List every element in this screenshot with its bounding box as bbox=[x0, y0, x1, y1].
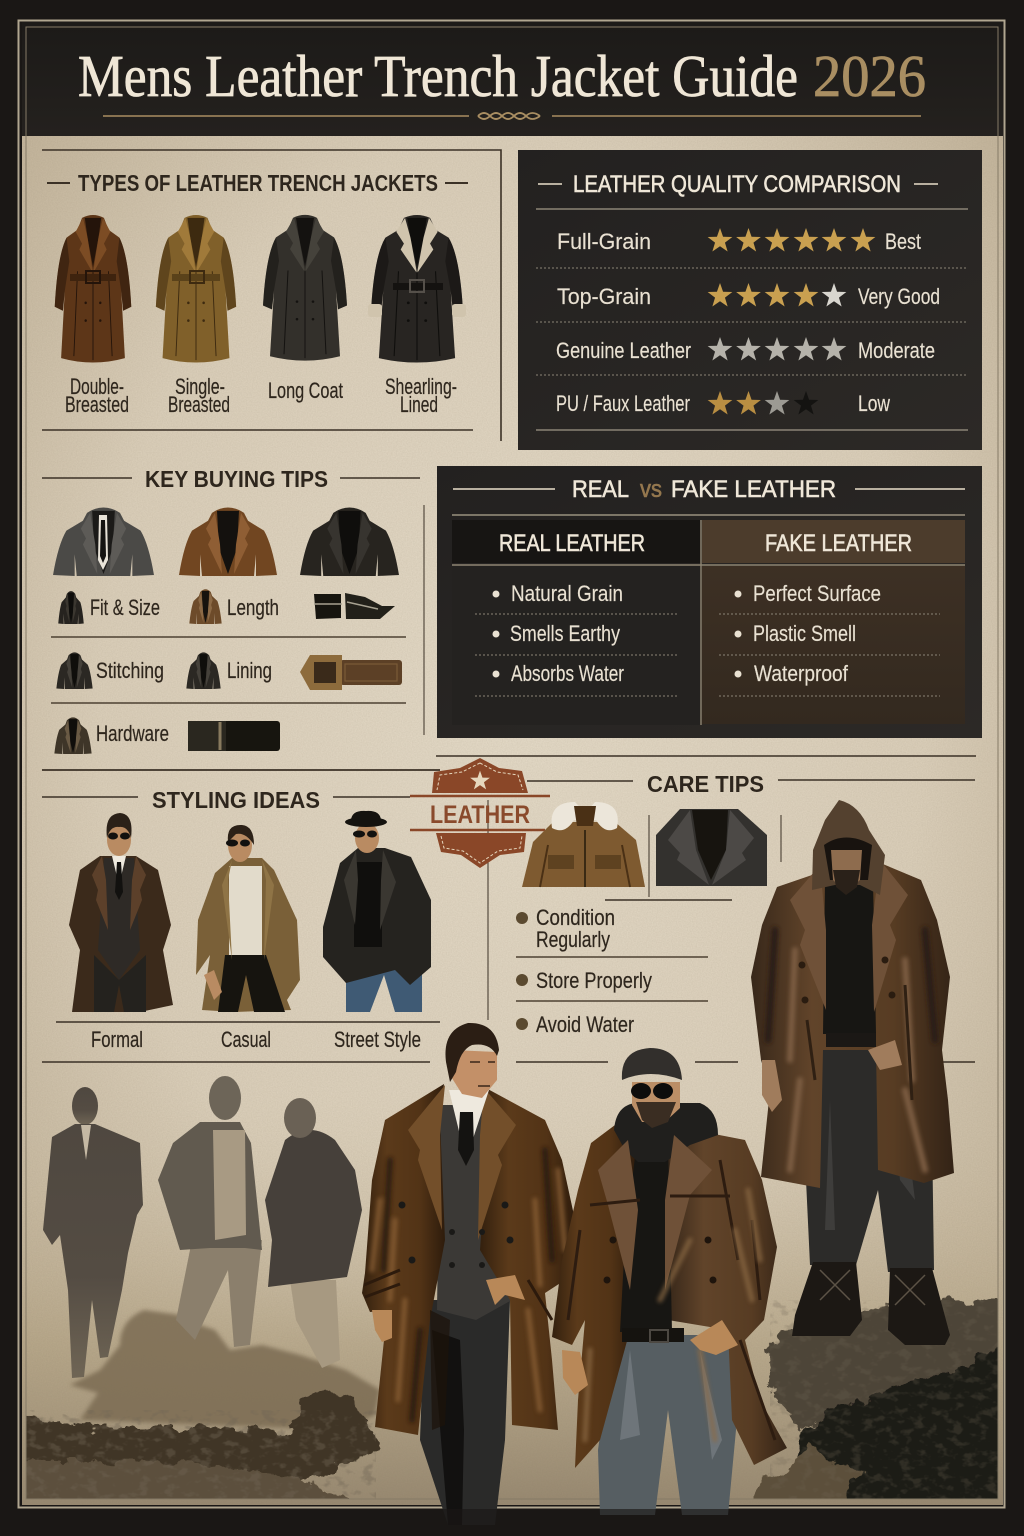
column: real leather: REAL LEATHER bbox=[499, 530, 645, 557]
coat buttons bbox=[604, 1236, 716, 1284]
coat: long coat bbox=[263, 215, 347, 403]
coat: single-breasted: Single- bbox=[175, 374, 225, 399]
long coat bbox=[751, 862, 954, 1188]
face bbox=[831, 850, 862, 892]
tip: fit and size: Fit & Size bbox=[90, 595, 160, 620]
tip: fit and size bbox=[58, 591, 160, 624]
column: fake leather: Plastic Smell bbox=[753, 621, 856, 646]
heading: key buying tips: KEY BUYING TIPS bbox=[145, 466, 328, 492]
silhouette: hooded bbox=[265, 1098, 362, 1368]
figure: street style bbox=[323, 811, 431, 1012]
sleeve shading bbox=[768, 930, 935, 1170]
heading: real vs fake: FAKE LEATHER bbox=[671, 476, 836, 503]
column: real leather: Smells Earthy bbox=[510, 621, 620, 646]
figure: casual bbox=[196, 825, 300, 1012]
column: fake leather: Perfect Surface bbox=[753, 581, 881, 606]
labels: styling: Street Style bbox=[334, 1027, 421, 1052]
row: pu / faux leather bbox=[556, 391, 890, 416]
labels: styling: Formal bbox=[91, 1027, 143, 1052]
section dividers bbox=[42, 756, 976, 1062]
panel: types of leather trench jackets bbox=[42, 150, 501, 441]
tip: length: Length bbox=[227, 595, 279, 620]
column: fake leather: Waterproof bbox=[754, 661, 849, 686]
coat: shearling-lined: Shearling- bbox=[385, 374, 457, 399]
coat: single-breasted bbox=[156, 215, 236, 417]
panel: styling ideas bbox=[42, 787, 440, 1052]
lapels bbox=[598, 1135, 712, 1290]
person: hooded man in trench bbox=[751, 800, 954, 1345]
bottom shadow band bbox=[0, 1509, 1024, 1536]
shirt and tie bbox=[449, 1090, 489, 1160]
panel: leather quality comparison bbox=[518, 150, 982, 450]
lapels bbox=[790, 860, 908, 1012]
coat: long coat: Long Coat bbox=[268, 378, 343, 403]
person: casual man bbox=[552, 1048, 787, 1515]
title: 2026 bbox=[813, 43, 926, 109]
tip: length bbox=[189, 589, 279, 624]
panel: real vs fake leather bbox=[437, 466, 982, 738]
coat: double-breasted: Breasted bbox=[65, 392, 129, 417]
badge: leather: LEATHER bbox=[430, 801, 530, 829]
person: formal man bbox=[362, 1023, 575, 1525]
column: fake leather bbox=[702, 520, 965, 724]
coat left bbox=[362, 1084, 445, 1435]
hands bbox=[762, 1040, 902, 1112]
jacket: shearling bomber bbox=[522, 802, 645, 887]
belt bbox=[622, 1328, 684, 1342]
heading: styling ideas: STYLING IDEAS bbox=[152, 787, 320, 813]
header band bbox=[22, 22, 1003, 136]
tip: lining: Lining bbox=[227, 658, 272, 683]
row: top-grain: Top-Grain bbox=[557, 284, 651, 309]
icon: dark belt bbox=[188, 721, 280, 751]
labels: styling: Casual bbox=[221, 1027, 271, 1052]
panel: key buying tips bbox=[42, 466, 424, 754]
panel: care tips bbox=[516, 771, 975, 1037]
heading: care tips: CARE TIPS bbox=[647, 771, 764, 797]
ground scenery bbox=[10, 1298, 1010, 1520]
heading: types: TYPES OF LEATHER TRENCH JACKETS bbox=[78, 170, 438, 196]
heading: real vs fake: REAL bbox=[572, 476, 629, 503]
trousers bbox=[420, 1300, 510, 1525]
coat: single-breasted: Breasted bbox=[168, 392, 230, 417]
icon: brown belt buckle bbox=[300, 655, 402, 690]
labels: styling bbox=[91, 1027, 421, 1052]
row: genuine leather: Moderate bbox=[858, 338, 935, 363]
tip: condition regularly: Regularly bbox=[536, 927, 610, 952]
row: full-grain: Full-Grain bbox=[557, 229, 651, 254]
sleeve sheen bbox=[372, 1150, 565, 1420]
tip: condition regularly: Condition bbox=[536, 905, 615, 930]
column: fake leather: FAKE LEATHER bbox=[765, 530, 912, 557]
jacket: black bbox=[300, 507, 399, 576]
tip: condition regularly bbox=[516, 905, 615, 952]
row: pu / faux leather: PU / Faux Leather bbox=[556, 391, 690, 416]
column: real leather bbox=[452, 520, 700, 725]
hands bbox=[562, 1320, 738, 1395]
silhouette: suit bbox=[43, 1087, 143, 1378]
row: full-grain: Best bbox=[885, 229, 921, 254]
jeans bbox=[598, 1335, 736, 1515]
tip: stitching: Stitching bbox=[96, 658, 164, 683]
head bbox=[632, 1082, 680, 1122]
vest bbox=[437, 1105, 512, 1320]
jacket: grey blazer bbox=[53, 507, 154, 576]
row: genuine leather bbox=[556, 337, 935, 363]
heading: real vs fake bbox=[453, 476, 965, 503]
figure: formal bbox=[69, 813, 173, 1012]
tip: hardware bbox=[54, 717, 169, 754]
head bbox=[450, 1050, 497, 1098]
tip: hardware: Hardware bbox=[96, 721, 169, 746]
tip: store properly: Store Properly bbox=[536, 968, 652, 993]
tip: avoid water: Avoid Water bbox=[536, 1012, 634, 1037]
coat: shearling-lined: Lined bbox=[400, 392, 438, 417]
row: top-grain bbox=[557, 283, 940, 309]
icon: dark straps bbox=[314, 593, 395, 619]
tip: stitching bbox=[56, 652, 164, 689]
heading: quality: LEATHER QUALITY COMPARISON bbox=[573, 171, 901, 198]
hands bbox=[372, 1275, 525, 1342]
belt bbox=[826, 1033, 876, 1047]
silhouettes: background figures bbox=[43, 1076, 362, 1378]
badge: leather bbox=[410, 758, 550, 868]
row: genuine leather: Genuine Leather bbox=[556, 338, 691, 363]
coat: shearling-lined bbox=[368, 215, 466, 417]
ornament bbox=[103, 113, 921, 119]
silhouette: casual bbox=[158, 1076, 262, 1347]
jacket: brown leather bbox=[179, 507, 277, 576]
coat left bbox=[552, 1125, 636, 1468]
hood bbox=[812, 800, 885, 895]
sunglasses bbox=[631, 1083, 673, 1099]
t-shirt bbox=[823, 880, 876, 1034]
column: real leather: Absorbs Water bbox=[511, 661, 624, 686]
coat: double-breasted: Double- bbox=[70, 374, 124, 399]
coat right bbox=[480, 1087, 575, 1430]
cap bbox=[622, 1048, 682, 1080]
row: pu / faux leather: Low bbox=[858, 391, 890, 416]
row: top-grain: Very Good bbox=[858, 284, 940, 309]
jacket: dark lapel bbox=[656, 809, 767, 886]
tip: lining bbox=[186, 652, 272, 689]
coat: double-breasted bbox=[55, 215, 131, 417]
vest buttons bbox=[398, 1202, 514, 1268]
column: real leather: Natural Grain bbox=[511, 581, 623, 606]
legs and boots bbox=[792, 1040, 950, 1345]
hoodie and tee bbox=[620, 1140, 672, 1332]
heading: real vs fake: vs bbox=[640, 476, 662, 503]
trench flap lines bbox=[568, 1160, 775, 1440]
row: full-grain bbox=[557, 228, 921, 254]
coat right bbox=[668, 1125, 787, 1465]
title: Mens Leather Trench Jacket Guide bbox=[78, 43, 798, 109]
lapels bbox=[408, 1085, 516, 1240]
